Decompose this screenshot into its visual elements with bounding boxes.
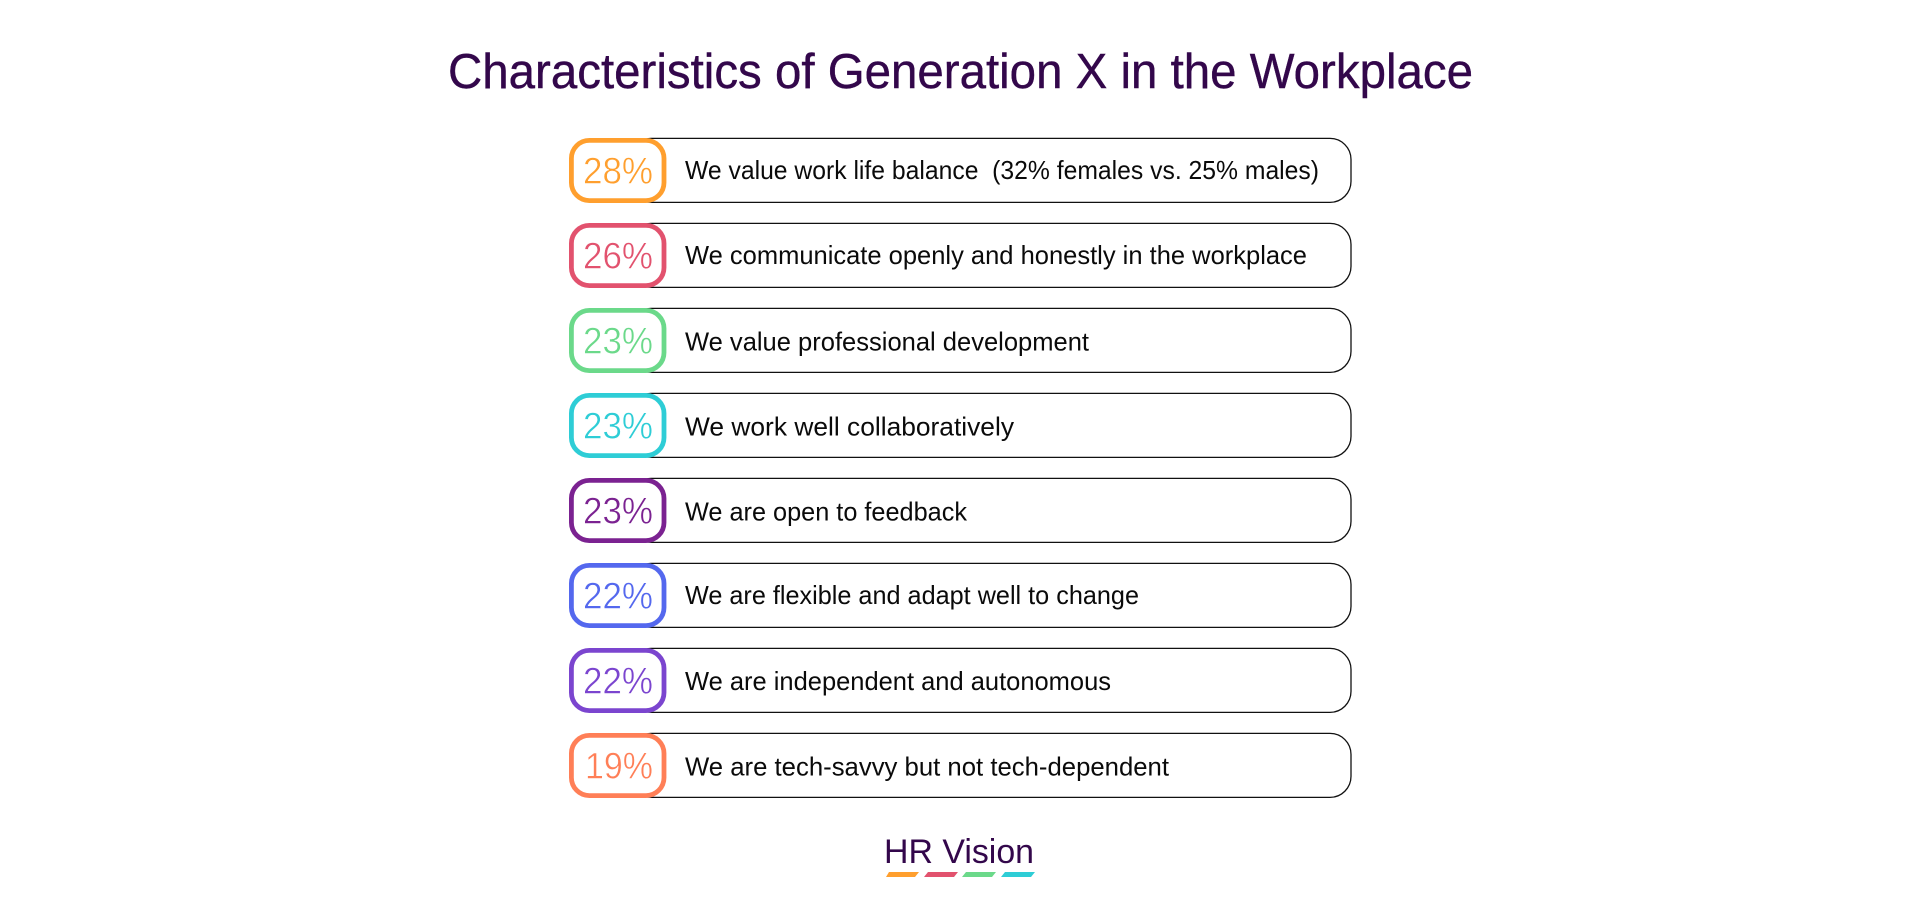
row: work collaboratively: We work well collaboratively (685, 412, 1014, 442)
row: open to feedback: We are open to feedback (685, 496, 968, 526)
row: tech-savvy: 19% (585, 746, 653, 786)
row: work life balance: We value work life balance (32% females vs. 25% males) (685, 155, 1319, 185)
row: work collaboratively: 23% (583, 406, 653, 446)
row: professional development (571, 308, 1351, 372)
title: Characteristics of Generation X in the Workplace (448, 45, 1473, 99)
row: independent and autonomous (571, 648, 1351, 712)
logo: HR Vision: HR Vision (884, 833, 1034, 871)
row: open to feedback: 23% (583, 490, 653, 532)
row: tech-savvy (571, 733, 1351, 797)
row: tech-savvy: We are tech-savvy but not tech-dependent (685, 752, 1170, 782)
row: professional development: 23% (583, 320, 653, 362)
row: flexible and adaptable (571, 563, 1351, 627)
row: communicate openly: 26% (583, 236, 653, 276)
row: work collaboratively (571, 393, 1351, 457)
row: professional development: We value professional development (685, 326, 1090, 356)
row: work life balance: 28% (583, 150, 653, 192)
panel: list of characteristics (571, 138, 1351, 797)
row: work life balance (571, 138, 1351, 202)
row: communicate openly: We communicate openly and honestly in the workplace (685, 240, 1307, 270)
row: independent and autonomous: We are independent and autonomous (685, 666, 1111, 696)
row: open to feedback (571, 478, 1351, 542)
row: communicate openly (571, 223, 1351, 287)
row: independent and autonomous: 22% (583, 660, 653, 702)
row: flexible and adaptable: 22% (583, 576, 653, 616)
row: flexible and adaptable: We are flexible and adapt well to change (685, 580, 1139, 610)
